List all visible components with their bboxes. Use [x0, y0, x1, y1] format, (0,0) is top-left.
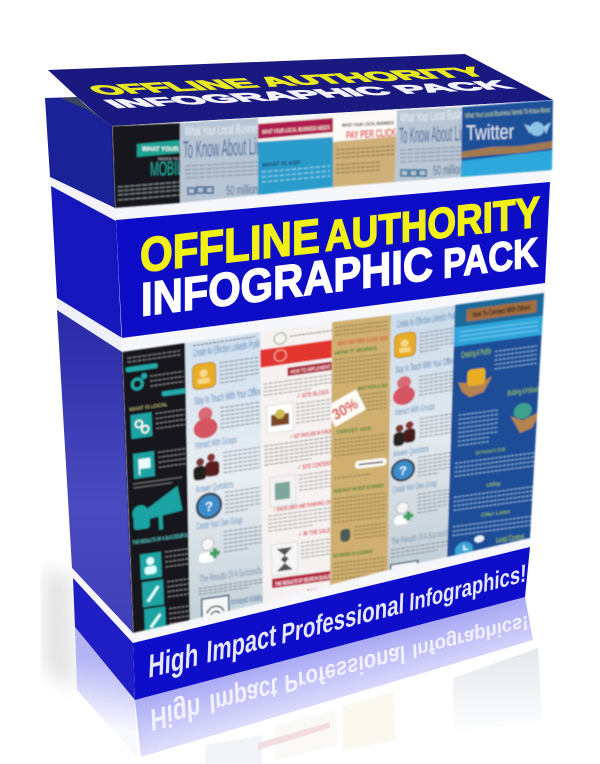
- main title panel: [116, 182, 550, 338]
- strip panel 6: twitter: [461, 100, 553, 177]
- lower image panels: Create An Effective LinkedIn Profile: [397, 310, 459, 331]
- panel 6: blue twitter panel: Lead Control: [496, 532, 524, 545]
- strip panel 5: links: [394, 106, 464, 182]
- panel 5: LinkedIn tips repeat: Increased Visibility: [420, 557, 450, 571]
- strip panel 2: links: [180, 118, 271, 203]
- icon: hourglass: [272, 541, 298, 576]
- panel 5: LinkedIn tips repeat: ?: [399, 464, 407, 478]
- icon: wifi frame: [202, 595, 229, 623]
- strip panel 2: links: What Your Local Business: [185, 120, 263, 139]
- lid title line 1: OFFLINE AUTHORITY: [81, 64, 493, 98]
- icon: clock and bubble: [455, 541, 473, 559]
- panel 1: dark infographic: [122, 343, 198, 636]
- icon: teal square links: [130, 412, 152, 439]
- strip panel 3: local business: WHAT IS ASP: [262, 160, 301, 169]
- strip panel 6: twitter: Twitter: [466, 121, 514, 145]
- icon: person with plus: [396, 501, 409, 514]
- icon: teal square tool: [142, 579, 164, 607]
- panel 2: LinkedIn tips: ?: [205, 498, 213, 514]
- panel 6: blue twitter panel: Creating A Profile: [461, 346, 491, 360]
- title: INFOGRAPHIC PACK: INFOGRAPHIC: [141, 236, 433, 326]
- panel 3: how to implement: [260, 322, 337, 607]
- panel 5: LinkedIn tips repeat: Interact With Groups: [395, 402, 435, 418]
- title: INFOGRAPHIC PACK: PACK: [443, 229, 538, 287]
- strip panel 3: local business: WHAT YOUR LOCAL BUSINESS NEEDS: [262, 125, 330, 136]
- panel 3: how to implement: ✓ SITE BLOGS: [297, 389, 329, 400]
- strip panel 5: links: 50 million: [433, 162, 463, 178]
- soft shadow around box: [44, 570, 75, 690]
- lid title line 2: INFOGRAPHIC PACK: [99, 78, 519, 111]
- strip panel 1: mobile: MOBILE: [150, 157, 190, 181]
- side: upper dark section: [45, 97, 115, 208]
- panel 4: tan percentage panel: KEYWORD PLACEMENT: [333, 549, 374, 560]
- icon: teal square link: [144, 606, 166, 634]
- reflection: front band: [135, 597, 533, 757]
- tagline text: High: [148, 637, 199, 686]
- panel 4: tan percentage panel: [324, 315, 391, 596]
- strip panel 4: pay per click: PAY PER CLICK: [346, 127, 396, 142]
- reflection: tagline text: High: [150, 690, 201, 739]
- panel 2: LinkedIn tips: Answer Questions: [196, 479, 234, 496]
- lower image panels: Stay In Touch With Your Offline: [395, 355, 455, 376]
- side: title section: [51, 186, 122, 338]
- box lid with title: [48, 54, 553, 126]
- callout: 30%: 30%: [330, 396, 361, 424]
- panel 2: LinkedIn tips: Create Your Own Group: [196, 515, 243, 533]
- icon: red figure: [198, 406, 212, 422]
- icon: hands with orange profile: [458, 376, 492, 399]
- strip panel 1: mobile: WHAT YOUR LOCAL: [142, 147, 201, 153]
- tagline band: [133, 547, 530, 700]
- panel 4: tan percentage panel: RESEARCH THE BEST KEYWORDS: [334, 483, 384, 495]
- title: OFFLINE AUTHORITY: AUTHORITY: [325, 188, 540, 261]
- strip panel 1: mobile: [111, 122, 181, 209]
- icon: photo frame: [267, 403, 293, 434]
- panel 5: LinkedIn tips repeat: Answer Questions: [393, 444, 429, 460]
- icon: two people: [196, 458, 204, 467]
- top image strip: To Know About Links: [399, 120, 473, 148]
- panel 4: tan percentage panel: TARGET ADS: [336, 426, 372, 436]
- tagline text: [148, 560, 527, 686]
- strip panel 4: pay per click: [333, 110, 397, 187]
- panel 3: how to implement: THE RESULTS OF SEARCH QUALITY: [275, 574, 333, 588]
- panel 4: tan percentage panel: WHY PAY PER CLICK ADS: [338, 335, 388, 348]
- reflection: left side: [75, 627, 137, 757]
- tagline text: Infographics!: [409, 560, 527, 617]
- icon: orange profile: [192, 362, 216, 390]
- reflection: tagline text: [150, 611, 529, 739]
- icon: two people: [395, 424, 404, 433]
- lower image panels: [122, 289, 545, 636]
- icon: hands with globe: [510, 412, 538, 434]
- product box illustration: [40, 54, 554, 764]
- icon: green puzzle: [270, 474, 296, 508]
- panel 1: dark infographic: THE RESULTS OF A SUCCESSFUL: [132, 533, 189, 547]
- panel 5: LinkedIn tips repeat: Create Your Own Group: [393, 478, 437, 496]
- icon: question mark circle: [392, 458, 414, 482]
- icon: red figure: [397, 375, 411, 390]
- strip panel 3: local business: [258, 115, 333, 195]
- tagline text: Impact: [206, 617, 277, 670]
- reflection: tagline text: Impact: [209, 671, 279, 720]
- panel 6: blue twitter panel: Utility: [486, 481, 501, 489]
- icon: orange profile: [394, 331, 416, 359]
- panel 4: tan percentage panel: HOW IT WORKS: [335, 346, 377, 357]
- panel 3: how to implement: DISPLAY: [307, 586, 329, 595]
- icon: question mark circle: [197, 492, 221, 520]
- panel 1: dark infographic: WHAT IS LOCAL: [129, 402, 168, 413]
- panel 3: how to implement: WHAT TO DO: [277, 594, 309, 605]
- side: image section: [57, 310, 133, 633]
- top image strip: What Your Local Business: [400, 106, 472, 125]
- reflection: tagline text: Infographics!: [412, 611, 529, 662]
- panel 5: LinkedIn tips repeat: The Results Of A Successful: [391, 528, 451, 547]
- title: OFFLINE AUTHORITY: OFFLINE: [140, 209, 320, 283]
- icon: megaphone: [131, 485, 183, 533]
- lower image panels: Create An Effective LinkedIn Profile: [193, 338, 261, 360]
- box left side: [45, 97, 135, 700]
- panel 5: LinkedIn tips repeat: [388, 305, 459, 585]
- panel 6: blue twitter panel: Get Involved In Chats: [475, 447, 506, 456]
- panel 3: how to implement: ✓ GET INVOLVED IN FORUMS: [290, 428, 334, 441]
- panel 3: how to implement: ✓ IN THE SALE: [298, 527, 331, 539]
- reflection of the box: [75, 597, 542, 764]
- side: lid shadow: [60, 97, 103, 120]
- panel 2: LinkedIn tips: The Results Of A Successful: [199, 565, 263, 586]
- panel 4: tan percentage panel: WHAT PEOPLE SEE: [357, 383, 388, 392]
- panel 3: how to implement: HOW TO IMPLEMENT: [290, 364, 331, 376]
- strip panel 2: links: 50 million: [226, 181, 258, 198]
- strip panel 4: pay per click: WHAT YOUR LOCAL BUSINESS: [342, 120, 394, 129]
- top image strip: [112, 100, 553, 208]
- side: tagline section: [73, 578, 135, 700]
- panel 3: how to implement: ✓ SITE CONTENT: [298, 460, 332, 472]
- tagline text: Professional: [281, 588, 405, 651]
- product box illustration: Building A Following: [507, 384, 542, 398]
- icon: small dark marker: [340, 528, 350, 542]
- icon: wifi frame: [389, 559, 420, 570]
- panel 6: blue twitter panel: Offer Links: [481, 509, 510, 519]
- panel 6: blue twitter panel: [446, 289, 545, 560]
- icon: teal square person: [140, 552, 162, 580]
- reflection: faint panels: [205, 648, 542, 764]
- title: OFFLINE AUTHORITY: [140, 188, 540, 283]
- lower image panels: Increased Visibility: [231, 592, 263, 607]
- panel 2: LinkedIn tips: [185, 332, 266, 624]
- icon: person with plus: [202, 537, 214, 551]
- panel 6: blue twitter panel: How To Connect With Others: [472, 302, 531, 319]
- panel 2: LinkedIn tips: Interact With Groups: [195, 435, 237, 452]
- icon: teal square flag: [133, 451, 155, 479]
- panel 3: how to implement: ✓ BACKLINKS AND RANKING LINKS: [273, 498, 335, 514]
- strip panel 1: mobile: NEEDS TO KNOW: [158, 156, 192, 161]
- lower image panels: Stay In Touch With Your Offline: [194, 386, 262, 408]
- box front silhouette: [112, 100, 553, 700]
- reflection: tagline text: Professional: [284, 639, 406, 698]
- top image strip: To Know About Links: [183, 133, 271, 164]
